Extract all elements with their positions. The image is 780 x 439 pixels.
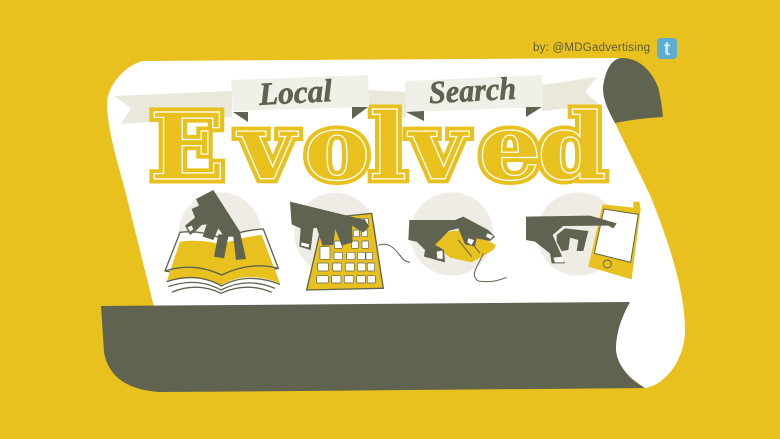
ribbon banner xyxy=(114,77,600,124)
ribbon panels xyxy=(231,75,543,122)
scroll bottom roll xyxy=(101,302,645,392)
heading: Local: Local xyxy=(257,72,333,112)
heading: Search: Search xyxy=(428,70,517,110)
icon: hand on smartphone xyxy=(526,192,641,279)
icon: twitter: t xyxy=(664,39,671,60)
icon: hand on keypad xyxy=(290,193,400,290)
icon: twitter xyxy=(657,38,677,60)
icon: hand on mouse xyxy=(400,192,507,282)
icon: hand on book xyxy=(165,190,280,293)
scroll top curl xyxy=(603,58,663,123)
title: Evolved: Evolved xyxy=(150,93,607,201)
paper scroll xyxy=(107,58,685,388)
title: Evolved: Evolved xyxy=(150,93,607,201)
credit line: by: @MDGadvertising xyxy=(533,42,650,54)
